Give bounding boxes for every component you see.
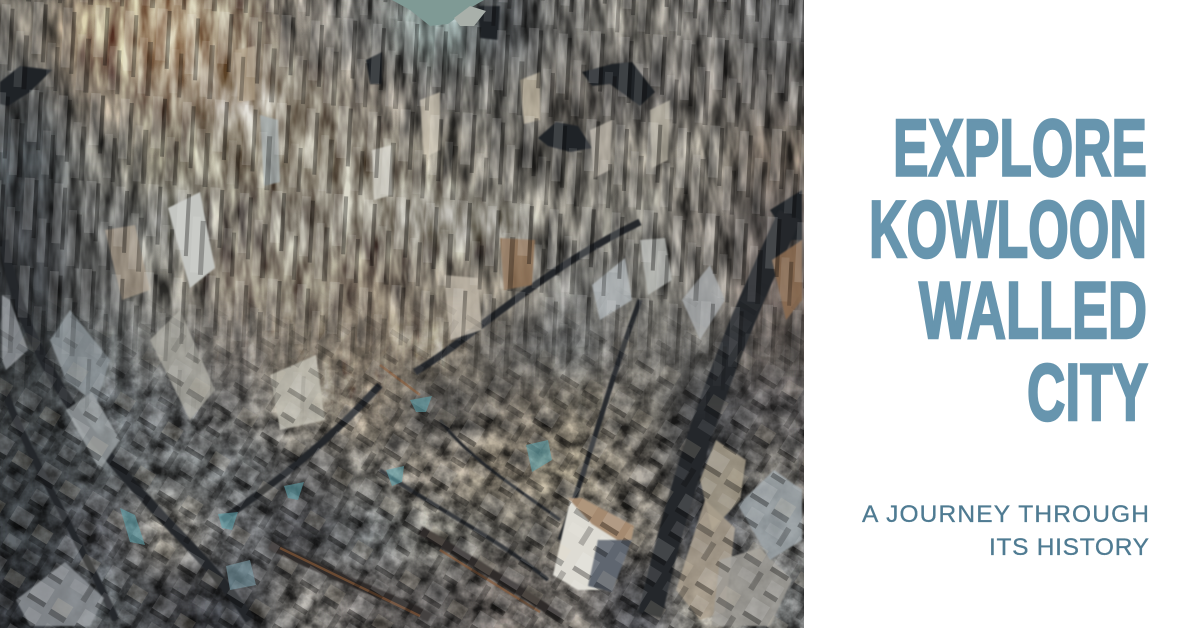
- subtitle: A journey through its history: A JOURNEY THROUGH: [862, 501, 1149, 528]
- photo texture: windows and rooftops: [0, 0, 804, 628]
- subtitle: A journey through its history: ITS HISTORY: [989, 534, 1149, 561]
- title: Explore Kowloon Walled City: [869, 104, 1148, 438]
- tower: tall white high-rise centre left: [168, 192, 215, 288]
- tower: white corner building with terrace bottom centre: [553, 498, 634, 592]
- warm sunlight glow at top left: [40, 10, 260, 90]
- dark hills and shadowed gaps: [0, 6, 802, 240]
- subtitle: A journey through its history: [862, 501, 1149, 561]
- teal accent rooftops: [120, 396, 552, 590]
- harbour water at the top: [392, 0, 486, 26]
- photo: aerial view of dense city: [0, 0, 804, 628]
- orange road surface and traffic: [280, 365, 540, 616]
- prominent towers: [2, 46, 802, 626]
- building pattern overlay: [0, 0, 804, 628]
- roads between city blocks: [4, 215, 790, 620]
- panel: white text background: [804, 0, 1200, 628]
